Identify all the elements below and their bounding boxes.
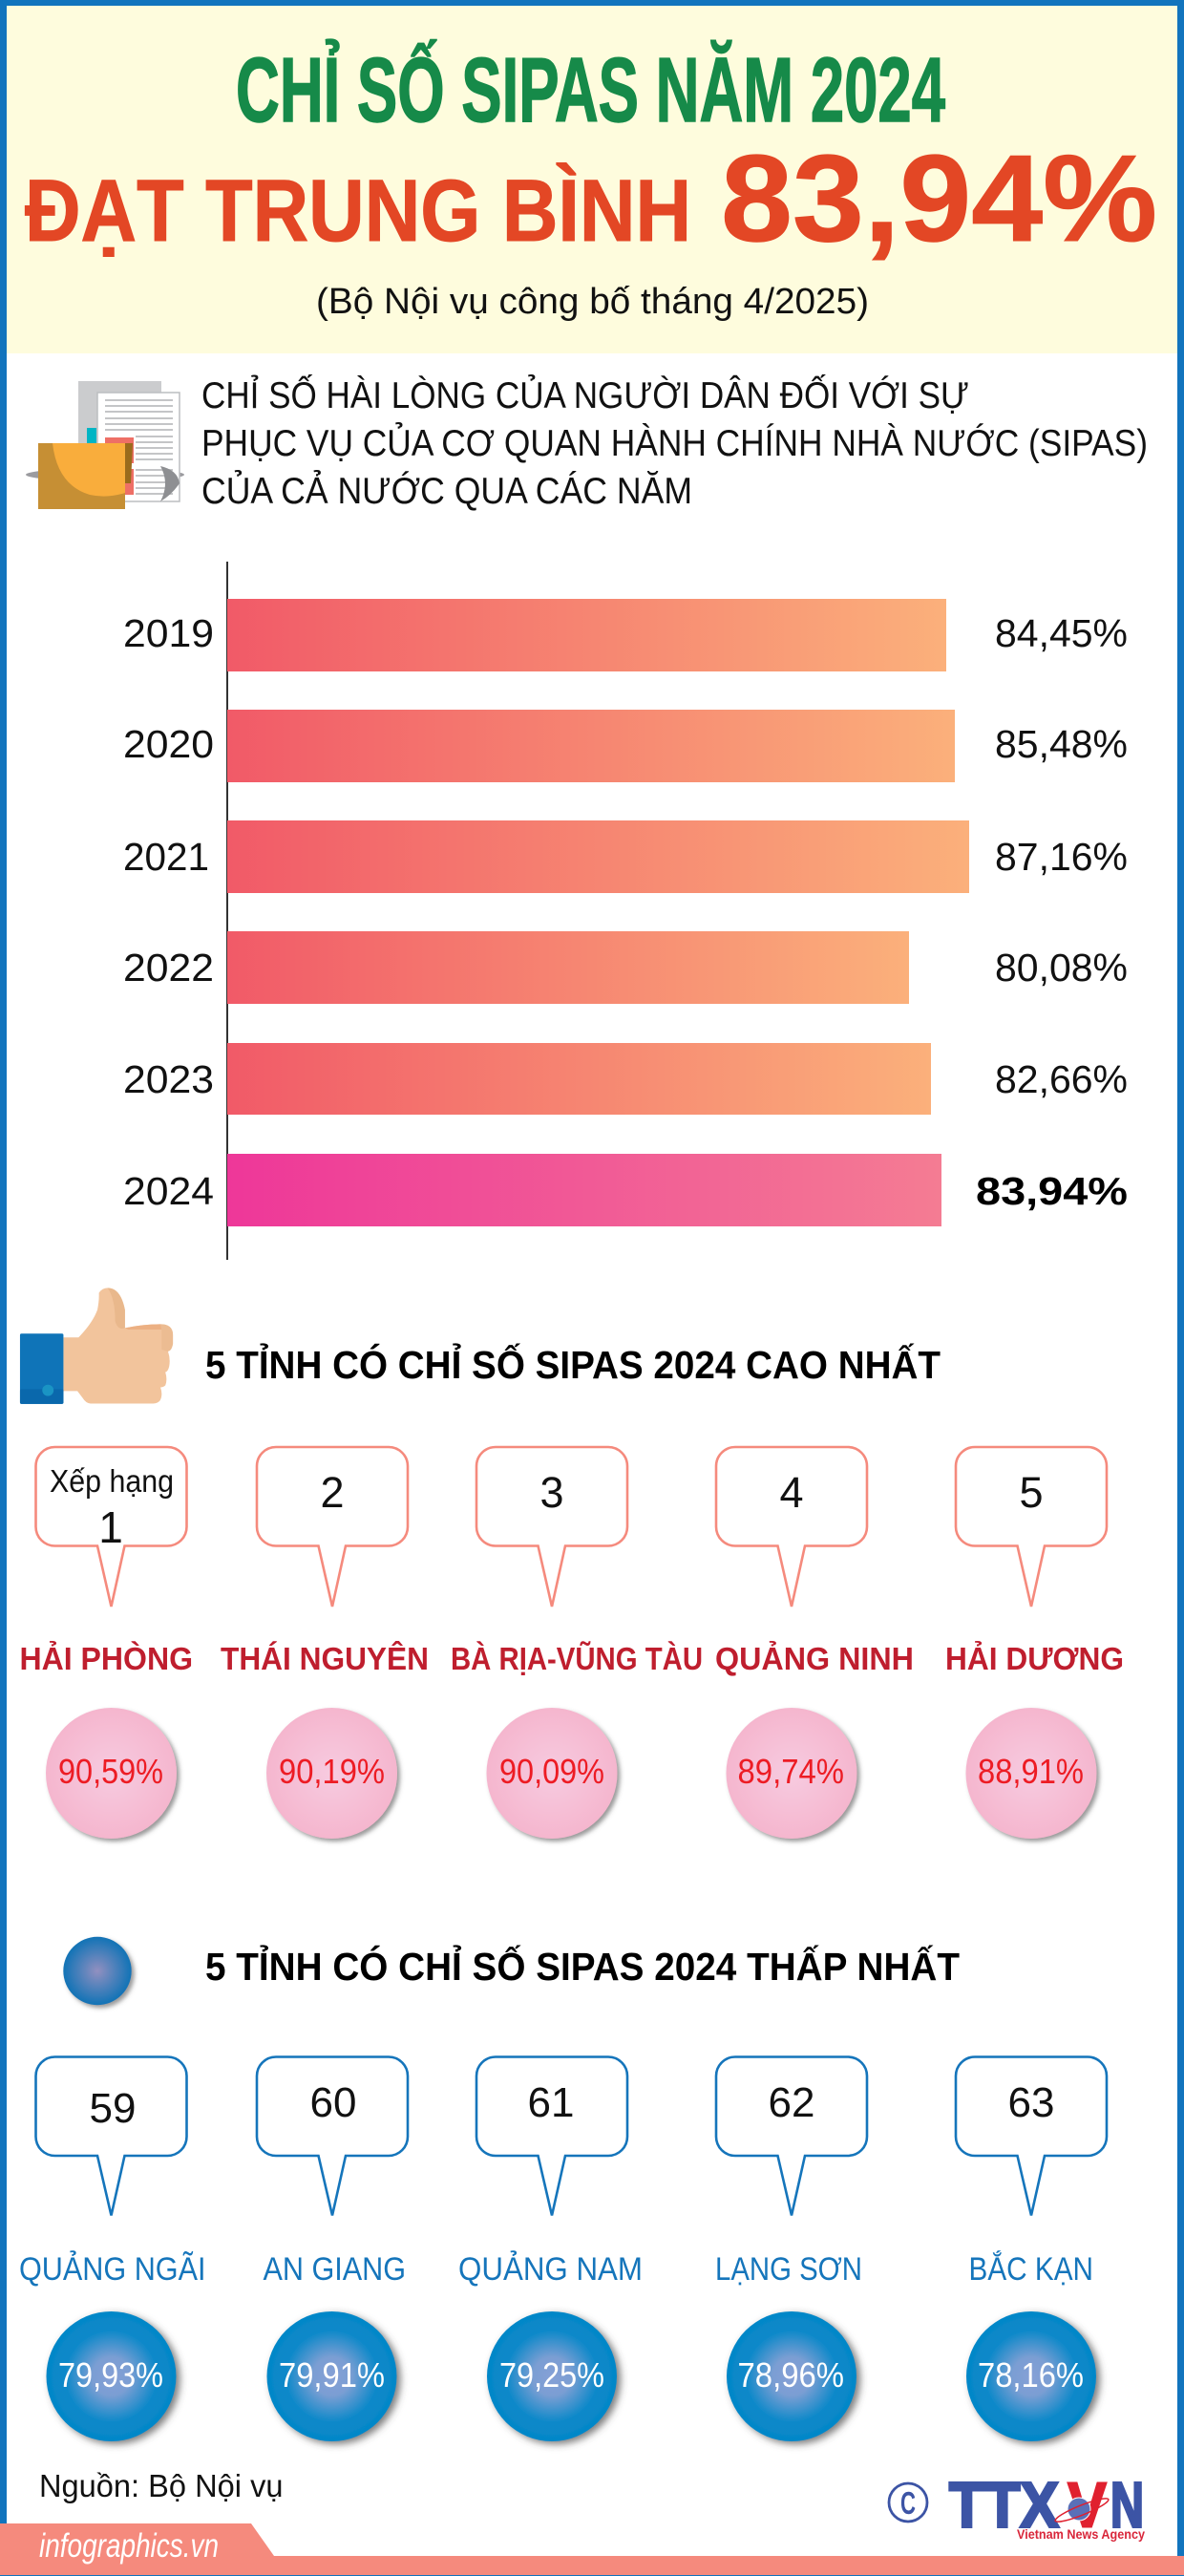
province 59: Quảng Ngãi: 79,93%: [58, 2355, 163, 2395]
section heading: SIPAS over the years: CỦA CẢ NƯỚC QUA CÁC NĂM: [201, 470, 692, 512]
province 63: Bắc Kạn: 63: [1008, 2079, 1054, 2126]
subtitle: (Bộ Nội vụ công bố tháng 4/2025): [316, 282, 869, 322]
title line 2: ĐẠT TRUNG BÌNH: [25, 161, 691, 260]
province 62: Lạng Sơn: [715, 2057, 867, 2441]
province 60: An Giang: [257, 2057, 408, 2441]
province 61: Quảng Nam: 61: [528, 2079, 574, 2126]
province 1: Hải Phòng: 90,59%: [58, 1752, 163, 1791]
province 63: Bắc Kạn: [956, 2057, 1107, 2441]
header panel: [7, 6, 1177, 353]
bar 2024: [123, 1154, 1128, 1226]
section heading: SIPAS over the years: CHỈ SỐ HÀI LÒNG CỦA NGƯỜI DÂN ĐỐI VỚI SỰ: [201, 373, 969, 416]
bar chart: SIPAS 2019-2024: [123, 562, 1128, 1260]
province 62: Lạng Sơn: 78,96%: [737, 2355, 844, 2395]
bar 2024: 2024: [123, 1169, 214, 1213]
bar 2019: 84,45%: [995, 611, 1128, 655]
logo wordmark: N: [1110, 2470, 1144, 2541]
province 1: Hải Phòng: HẢI PHÒNG: [19, 1641, 193, 1676]
bar 2023: 2023: [123, 1057, 214, 1101]
logo tagline: Vietnam News Agency: [1017, 2527, 1145, 2542]
headline value: 83,94%: [721, 130, 1157, 267]
province 3: Bà Rịa-Vũng Tàu: [451, 1447, 703, 1839]
province 61: Quảng Nam: 79,25%: [499, 2355, 604, 2395]
icon: blue ball: [63, 1937, 132, 2005]
province 60: An Giang: AN GIANG: [264, 2251, 406, 2288]
province 4: Quảng Ninh: 89,74%: [737, 1752, 844, 1791]
province 2: Thái Nguyên: 2: [320, 1468, 345, 1517]
province 60: An Giang: 79,91%: [279, 2355, 385, 2395]
logo: TTXVN: [889, 2470, 1145, 2542]
province 4: Quảng Ninh: 4: [779, 1468, 804, 1517]
province 61: Quảng Nam: QUẢNG NAM: [458, 2251, 643, 2288]
bar 2023: 82,66%: [995, 1057, 1128, 1101]
province 2: Thái Nguyên: 90,19%: [279, 1752, 385, 1791]
bar 2020: 85,48%: [995, 722, 1128, 766]
bar 2022: 80,08%: [995, 946, 1128, 990]
heading: top 5 provinces: 5 TỈNH CÓ CHỈ SỐ SIPAS 2024 CAO NHẤT: [205, 1343, 941, 1387]
province 5: Hải Dương: 5: [1019, 1468, 1044, 1517]
province 1: Hải Phòng: [19, 1447, 193, 1839]
province 59: Quảng Ngãi: 59: [90, 2085, 136, 2132]
bar 2022: [123, 931, 1128, 1004]
bar 2024: 83,94%: [976, 1169, 1128, 1213]
icon: copyright: [889, 2483, 927, 2522]
bar 2019: 2019: [123, 611, 214, 655]
footer band: [0, 2523, 1184, 2576]
province 3: Bà Rịa-Vũng Tàu: 3: [539, 1468, 564, 1517]
province 2: Thái Nguyên: [221, 1447, 429, 1839]
bar 2023: [123, 1043, 1128, 1115]
province 4: Quảng Ninh: QUẢNG NINH: [715, 1641, 914, 1676]
logo wordmark: [949, 2470, 1144, 2541]
province 5: Hải Dương: [945, 1447, 1124, 1839]
bar 2022: 2022: [123, 946, 214, 990]
logo wordmark: TTX: [949, 2470, 1059, 2541]
logo wordmark: V: [1068, 2470, 1107, 2541]
heading: bottom 5 provinces: 5 TỈNH CÓ CHỈ SỐ SIPAS 2024 THẤP NHẤT: [205, 1945, 960, 1989]
icon: copyright: C: [900, 2485, 916, 2521]
icon: documents and folder: [26, 381, 184, 509]
bar 2020: 2020: [123, 722, 214, 766]
source note: Nguồn: Bộ Nội vụ: [39, 2468, 283, 2503]
province 63: Bắc Kạn: 78,16%: [978, 2355, 1084, 2395]
province 4: Quảng Ninh: [715, 1447, 914, 1839]
bar 2019: [123, 599, 1128, 671]
province 1: Hải Phòng: 1: [98, 1502, 123, 1552]
bar 2021: 87,16%: [995, 835, 1128, 879]
province 63: Bắc Kạn: BẮC KẠN: [968, 2251, 1093, 2288]
footer site name: infographics.vn: [39, 2527, 219, 2565]
province 61: Quảng Nam: [458, 2057, 643, 2441]
province 3: Bà Rịa-Vũng Tàu: 90,09%: [499, 1752, 604, 1791]
province 5: Hải Dương: HẢI DƯƠNG: [945, 1641, 1124, 1676]
icon: thumbs up: [20, 1288, 173, 1404]
province 5: Hải Dương: 88,91%: [978, 1752, 1084, 1791]
province 59: Quảng Ngãi: QUẢNG NGÃI: [19, 2251, 206, 2288]
province 3: Bà Rịa-Vũng Tàu: BÀ RỊA-VŨNG TÀU: [451, 1641, 703, 1676]
province 1: Hải Phòng: Xếp hạng: [50, 1463, 174, 1499]
province 62: Lạng Sơn: 62: [769, 2079, 814, 2126]
bar 2021: [123, 820, 1128, 893]
icon: globe with orbit: [1053, 2495, 1110, 2525]
province 60: An Giang: 60: [310, 2079, 356, 2126]
bar 2020: [123, 710, 1128, 782]
province 59: Quảng Ngãi: [19, 2057, 206, 2441]
bar 2021: 2021: [123, 835, 209, 879]
province 62: Lạng Sơn: LẠNG SƠN: [715, 2251, 862, 2288]
province 2: Thái Nguyên: THÁI NGUYÊN: [221, 1641, 429, 1676]
section heading: SIPAS over the years: [201, 373, 1148, 512]
